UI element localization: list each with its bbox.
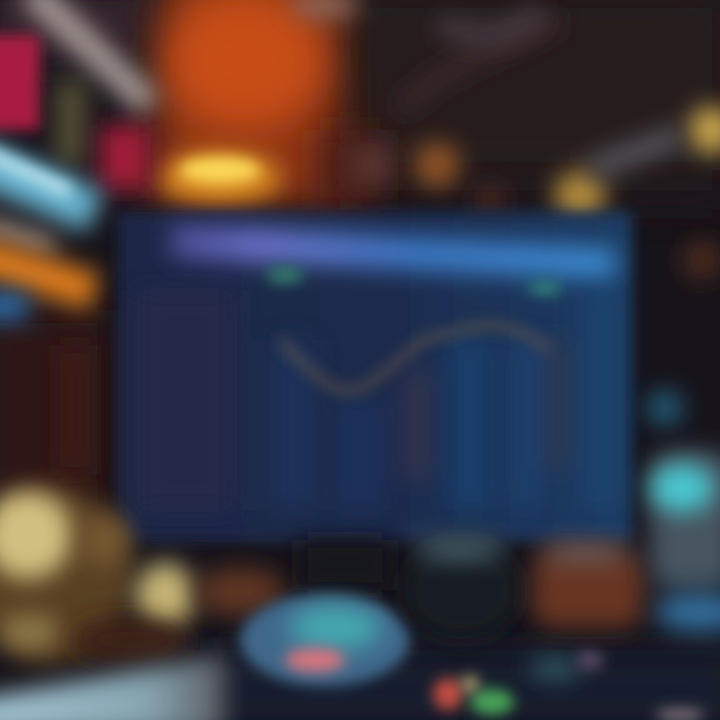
monitor: [118, 212, 632, 542]
monitor stand shadow: [300, 540, 390, 590]
orange glow backdrop: [150, 0, 560, 210]
colored dots on desk: [433, 651, 705, 720]
right side device: [647, 390, 720, 632]
cyan screen glow: [650, 464, 714, 512]
chart line: [280, 326, 550, 391]
bokeh lights: [350, 106, 720, 280]
dark bowl: [404, 536, 520, 640]
lamp glow: [158, 152, 282, 204]
chart columns: [135, 290, 615, 510]
bottom-left light surface: [0, 655, 225, 720]
green ticks: [267, 267, 303, 283]
monitor panel: [118, 212, 632, 542]
left wall stripes: [0, 0, 150, 475]
monitor header bar: [170, 224, 615, 280]
small blue light: [647, 390, 683, 426]
gold coins: [0, 487, 285, 663]
brown cup: [532, 543, 644, 628]
round plate: [240, 594, 410, 686]
